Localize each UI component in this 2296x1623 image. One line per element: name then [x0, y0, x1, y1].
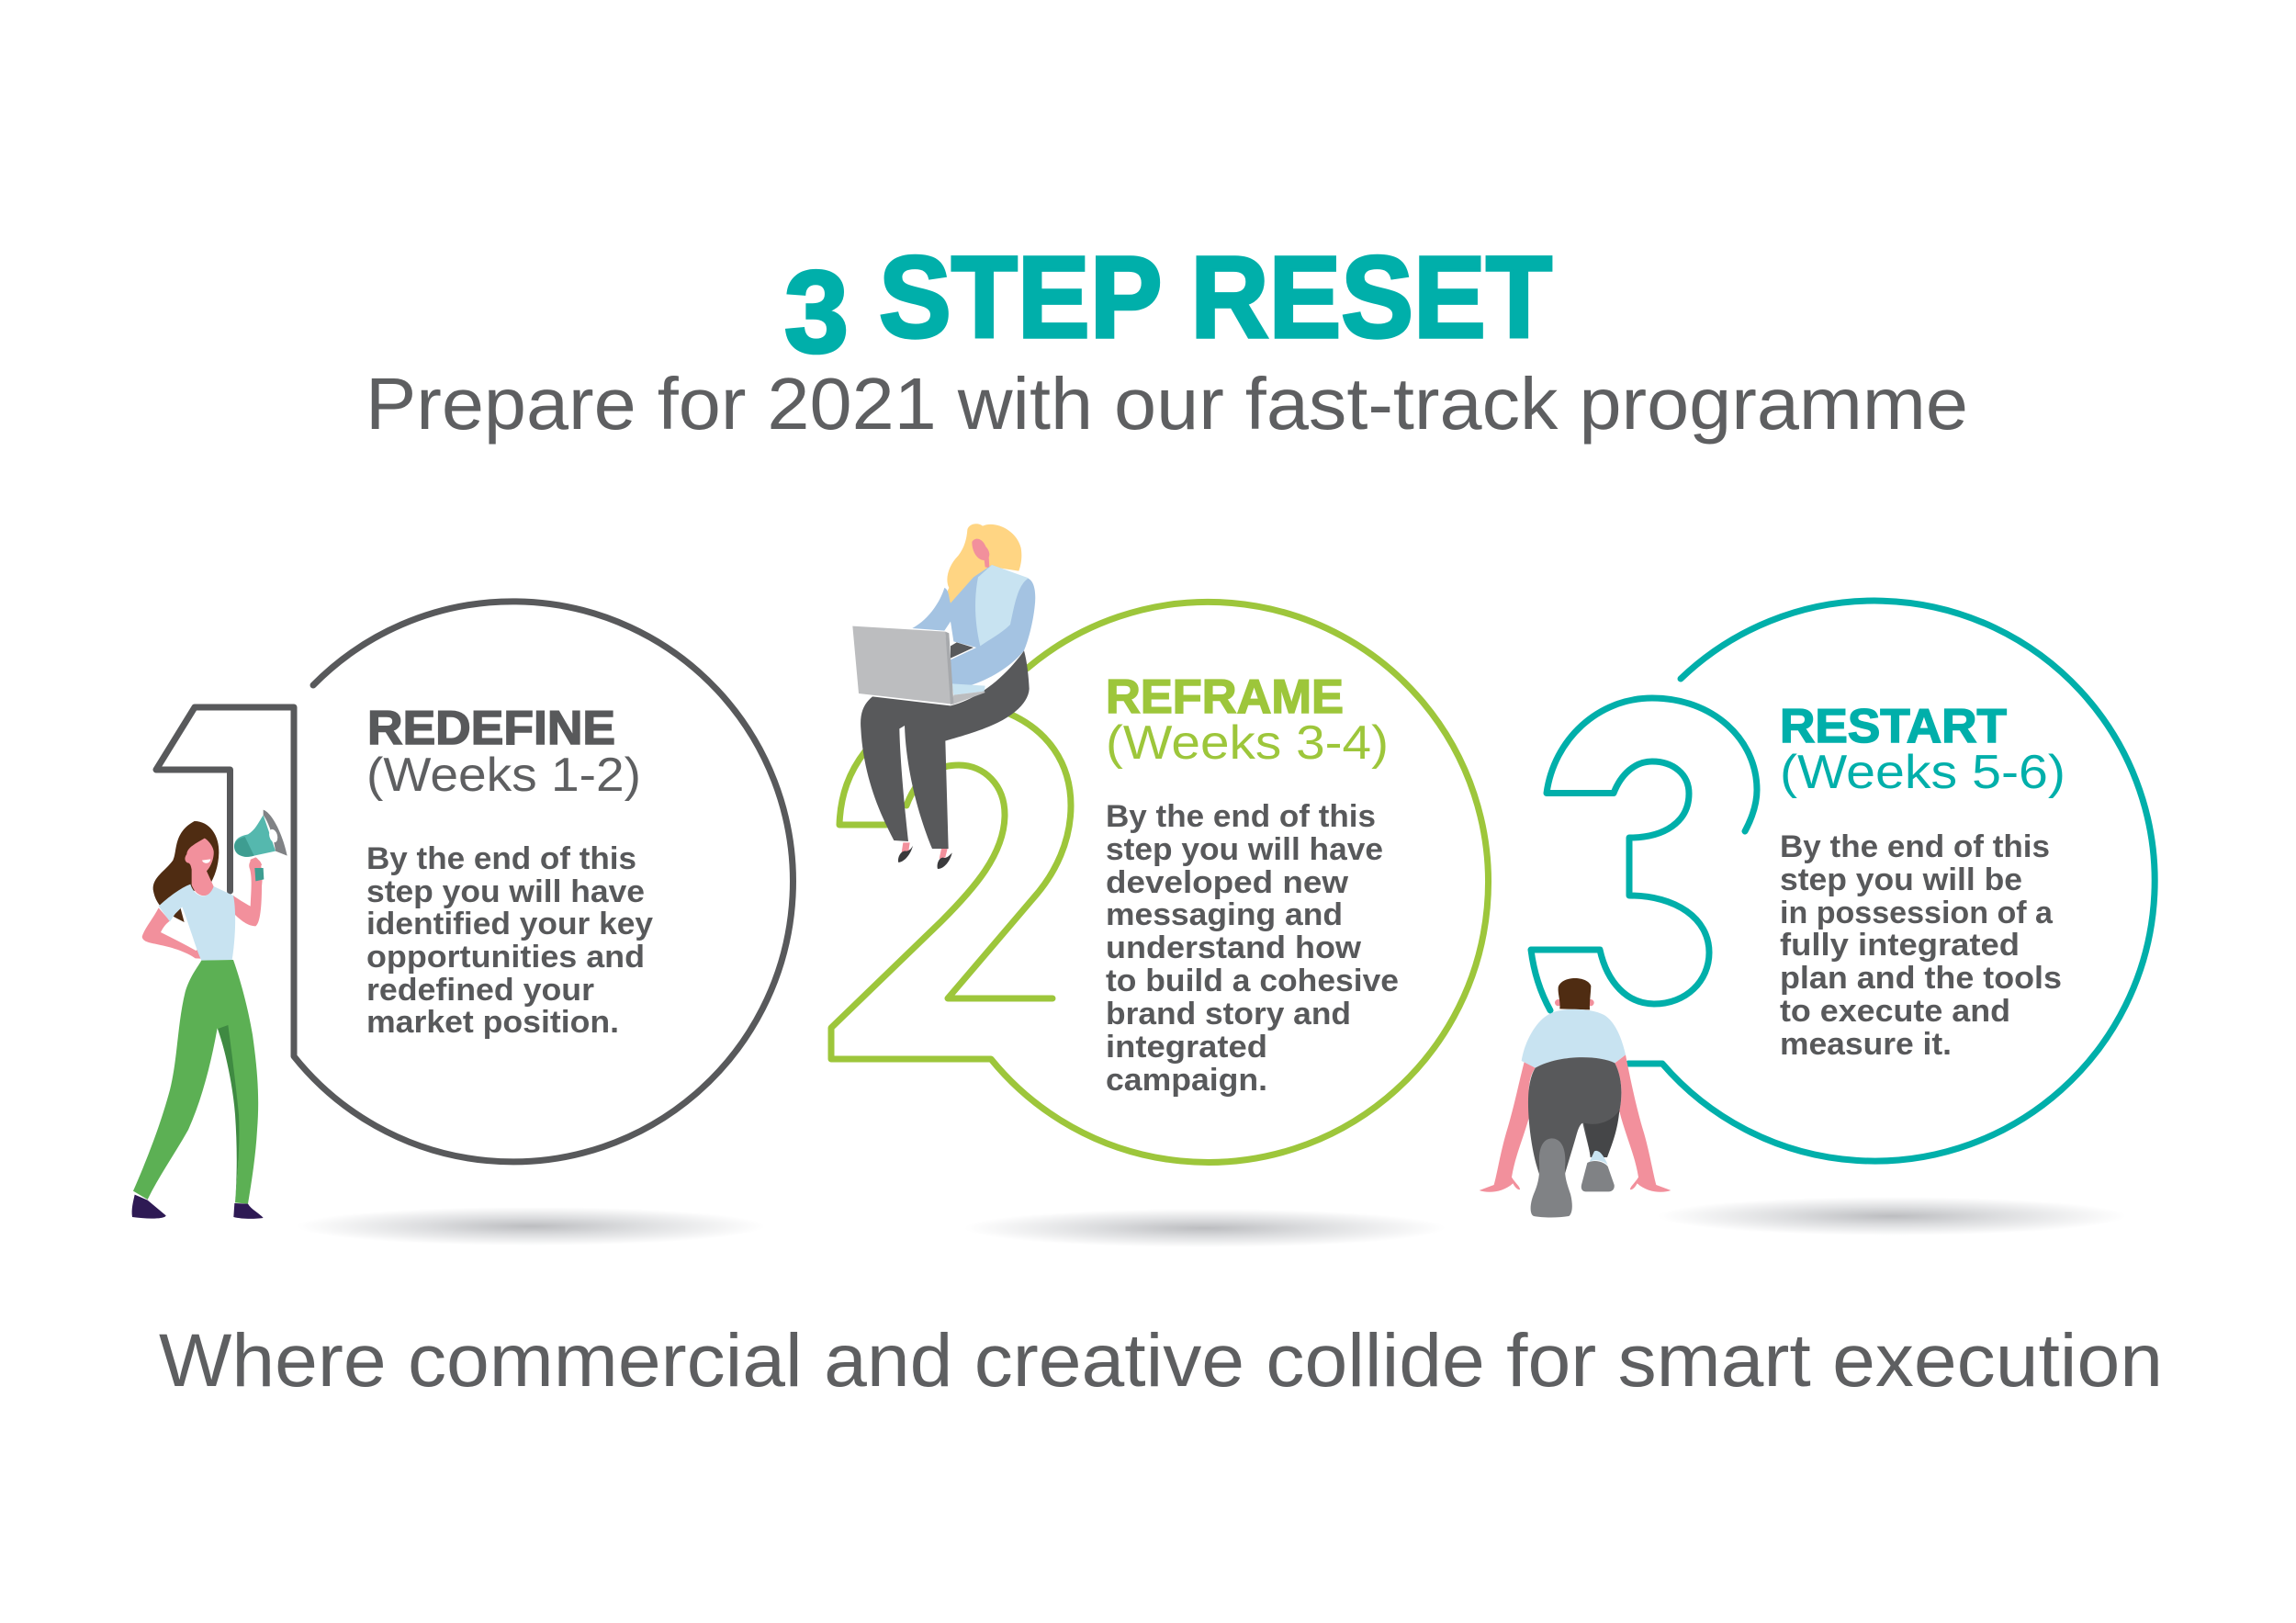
panel: step 2 reframe: [831, 524, 1489, 1247]
step 1 weeks: (Weeks 1-2): [366, 749, 641, 802]
numeral 1 ring outline: [156, 602, 793, 1162]
step 2 body text: to build a cohesive: [1106, 964, 1399, 998]
step 3 heading: RESTART: [1780, 700, 2007, 753]
icon: woman with laptop: [852, 524, 1035, 869]
step 2 weeks: (Weeks 3-4): [1106, 716, 1389, 770]
step 1 body text: By the end of this: [366, 841, 636, 876]
step 3 body text: to execute and: [1780, 994, 2010, 1029]
step 3 body text: plan and the tools: [1780, 961, 2062, 996]
panel: step 3 restart: [1480, 601, 2155, 1235]
icon: woman with megaphone: [132, 810, 287, 1219]
step 1 body text: market position.: [366, 1005, 619, 1040]
step 2 body text: brand story and: [1106, 997, 1351, 1031]
ground shadow 1: [297, 1207, 765, 1245]
numeral 3 ring outline: [1531, 601, 2155, 1161]
step 2 heading: REFRAME: [1106, 671, 1344, 724]
icon: man in starting position: [1480, 978, 1671, 1217]
step 1 body text: opportunities and: [366, 940, 645, 975]
step 1 body text: identified your key: [366, 907, 653, 941]
panel: step 1 redefine: [132, 602, 793, 1245]
ground shadow 3: [1658, 1197, 2126, 1235]
ground shadow 2: [964, 1209, 1446, 1247]
footer tagline: Where commercial and creative collide for smart execution: [159, 1319, 2163, 1403]
step 2 body text: step you will have: [1106, 832, 1383, 867]
step 2 body text: developed new: [1106, 865, 1349, 900]
step 3 body text: step you will be: [1780, 862, 2022, 897]
step 2 body text: [1106, 799, 1399, 1098]
step 1 body text: [366, 841, 653, 1040]
step 2 body text: messaging and: [1106, 897, 1343, 932]
step 3 weeks: (Weeks 5-6): [1780, 746, 2065, 799]
step 2 body text: campaign.: [1106, 1063, 1267, 1098]
step 3 body text: in possession of a: [1780, 896, 2054, 930]
title: 3: [784, 247, 849, 377]
step 3 body text: [1780, 829, 2062, 1062]
subtitle: Prepare for 2021 with our fast-track programme: [366, 363, 1968, 445]
step 3 body text: By the end of this: [1780, 829, 2050, 864]
step 2 body text: understand how: [1106, 930, 1362, 965]
step 1 heading: REDEFINE: [367, 702, 615, 755]
step 3 body text: measure it.: [1780, 1027, 1952, 1062]
title: STEP RESET: [879, 232, 1552, 362]
step 2 body text: By the end of this: [1106, 799, 1376, 834]
numeral 2 ring outline: [831, 602, 1489, 1162]
step 1 body text: redefined your: [366, 973, 594, 1008]
step 3 body text: fully integrated: [1780, 928, 2020, 963]
step 1 body text: step you will have: [366, 874, 645, 909]
step 2 body text: integrated: [1106, 1030, 1267, 1065]
